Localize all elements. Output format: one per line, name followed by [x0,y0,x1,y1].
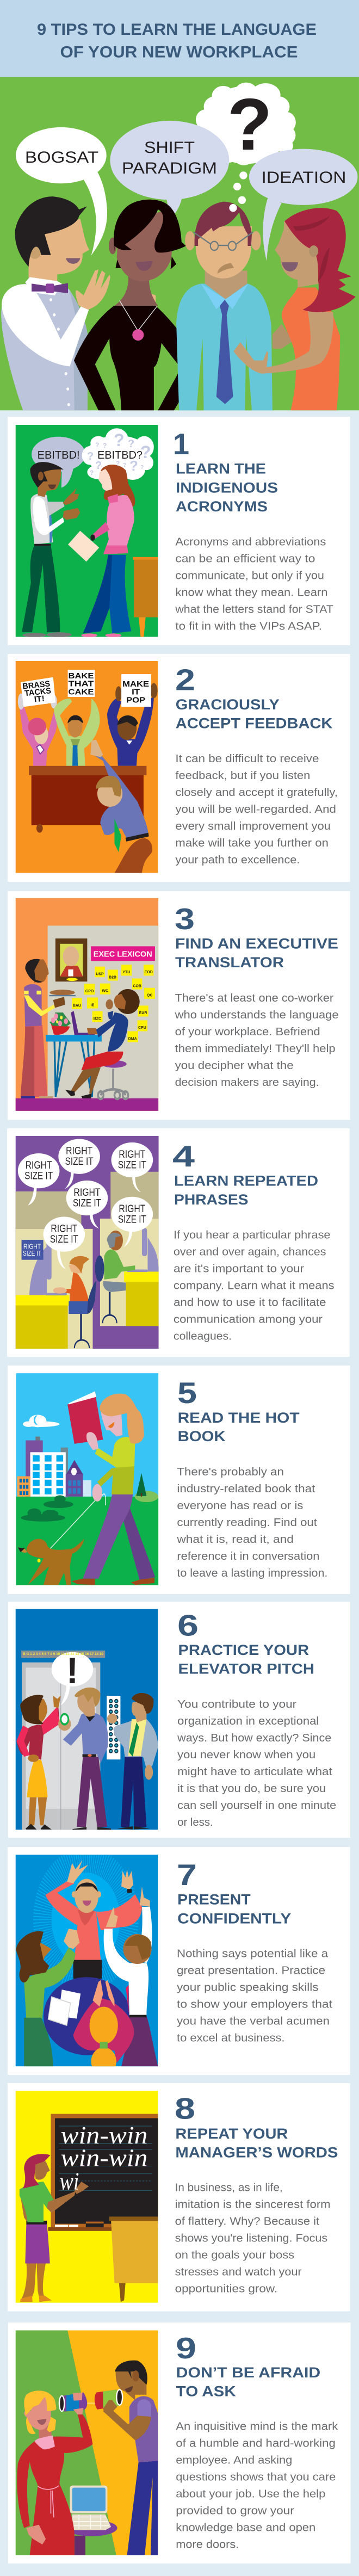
panel: tip 8 [8,2083,350,2311]
illustration: coworkers holding jargon signs: CAKE [69,687,94,696]
body text tip 5: what it is, read it, and [176,1534,294,1546]
heading tip 5: READ THE HOT [178,1410,300,1426]
illustration: executive lexicon office: QC [147,993,153,998]
heading tip 7: CONFIDENTLY [177,1910,291,1926]
body text tip 9: employee. And asking [176,2455,292,2467]
illustration: cubicles repeating right size it: SIZE IT [118,1160,146,1171]
illustration: woman writing win-win on chalkboard: win-win [61,2121,148,2149]
body text tip 9 [176,2421,338,2550]
heading tip 1: INDIGENOUS [176,480,278,496]
illustration: executive lexicon office: EAR [139,1011,147,1015]
panel: tip 9 [8,2322,350,2563]
body text tip 3: you decipher what the [175,1060,294,1072]
illustration: coworkers and acronym confusion: ? [90,469,94,477]
body text tip 7: to show your employers that [177,1998,332,2010]
panel: tip 6 [8,1602,350,1838]
body text tip 6: you never know when you [177,1749,315,1761]
illustration: executive lexicon office: BZC [94,1017,101,1021]
body text tip 1: communicate, but only if you [175,570,324,582]
icon: speech bubble bogsat [16,127,107,256]
body text tip 1: can be an efficient way to [175,553,315,565]
bubble label: shift paradigm [122,139,217,177]
heading tip 4: PHRASES [174,1191,248,1208]
illustration: confident presenter [16,1855,158,2075]
body text tip 2: your path to excellence. [175,854,300,866]
body text tip 5: to leave a lasting impression. [177,1567,327,1579]
body text tip 2: feedback, but if you listen [175,770,310,782]
body text tip 3: who understands the language [174,1009,339,1021]
body text tip 3 [174,992,339,1089]
number 9: 9 [176,2331,196,2365]
illustration: executive lexicon office: CPU [138,1026,146,1030]
body text tip 1: know what they mean. Learn [175,587,327,599]
panel: tip 7 [8,1847,350,2075]
body text tip 3: of your workplace. Befriend [175,1026,320,1038]
illustration: executive lexicon office: B2B [109,975,116,979]
illustration: coworkers and acronym confusion: EBITBD? [97,449,143,461]
bubble label: ideation: IDEATION [261,169,346,187]
body text tip 5: There's probably an [177,1466,284,1478]
body text tip 4: are it's important to your [174,1263,304,1275]
body text tip 4: company. Learn what it means [174,1280,334,1292]
heading tip 8 [175,2126,338,2160]
body text tip 6: or less. [177,1817,213,1828]
heading tip 6: PRACTICE YOUR [178,1642,309,1658]
illustration: executive lexicon office: EOD [145,971,153,974]
illustration: executive lexicon office: IE [91,1003,95,1007]
heading tip 3: FIND AN EXECUTIVE [175,935,338,952]
hero illustration: four coworkers talking [0,77,359,410]
heading tip 1: ACRONYMS [176,498,268,515]
body text tip 2: closely and accept it gratefully, [175,787,338,799]
body text tip 4: If you hear a particular phrase [174,1230,331,1241]
illustration: coworkers and acronym confusion: ? [140,465,144,471]
illustration: executive lexicon office: GPO [85,990,94,993]
body text tip 9: of a humble and hard-working [176,2437,336,2449]
illustration: executive lexicon office: USP [96,973,104,976]
illustration: cubicles repeating right size it: SIZE IT [65,1156,94,1167]
body text tip 8: In business, as in life, [175,2182,283,2194]
panel: tip 4 [7,1128,350,1357]
illustration: cubicles repeating right size it: RIGHT [119,1149,146,1160]
illustration: executive lexicon office [16,898,158,1111]
illustration: cubicles repeating right size it: RIGHT [51,1224,78,1235]
illustration: coworkers holding jargon signs: TACKS [24,686,52,698]
illustration: elevator conversation [16,1609,158,1830]
icon: thought bubble [196,83,296,204]
illustration: coworkers and acronym confusion: EBITBD! [38,449,80,461]
icon: question mark: ? [227,83,272,165]
illustration: cubicles repeating right size it: SIZE IT [24,1171,53,1182]
heading tip 1: LEARN THE [176,460,266,477]
body text tip 5: currently reading. Find out [177,1517,317,1529]
illustration: coworkers and acronym confusion: ? [128,438,134,450]
illustration: cubicles repeating right size it: SIZE IT [73,1198,101,1209]
illustration: woman writing win-win on chalkboard: win-win [61,2143,148,2171]
number 4: 4 [172,1139,195,1173]
heading tip 8: REPEAT YOUR [175,2126,288,2142]
body text tip 1: Acronyms and abbreviations [175,536,326,548]
illustration: woman writing win-win on chalkboard: wi [60,2167,79,2195]
body text tip 4: and how to use it to facilitate [174,1297,326,1309]
illustration: elevator conversation: ! [66,1650,78,1691]
heading tip 2: GRACIOUSLY [176,696,280,713]
illustration: tin can telephone [16,2330,158,2555]
icon: speech bubble shift paradigm [110,121,229,222]
heading tip 5 [178,1410,300,1444]
body text tip 9: about your job. Use the help [176,2488,325,2500]
body text tip 8: on the goals your boss [175,2249,294,2261]
body text tip 7: you have the verbal acumen [177,2015,330,2027]
body text tip 7: your public speaking skills [177,1981,319,1993]
body text tip 6: You contribute to your [177,1698,297,1710]
number 5: 5 [177,1376,197,1410]
illustration: woman writing win-win on chalkboard [16,2091,158,2303]
illustration: woman reading while walking dog [16,1373,158,1585]
body text tip 6: it is that you do, be sure you [177,1783,326,1795]
number 8: 8 [175,2092,195,2126]
illustration: cubicles repeating right size it: SIZE IT [23,1249,41,1257]
number 6: 6 [177,1608,199,1642]
body text tip 1: to fit in with the VIPs ASAP. [175,621,322,633]
body text tip 6: can sell yourself in one minute [177,1800,336,1812]
heading tip 8: MANAGER’S WORDS [175,2144,338,2160]
illustration: coworkers and acronym confusion: ? [123,462,126,468]
person: man with glasses [176,202,273,410]
body text tip 9: An inquisitive mind is the mark [176,2421,338,2433]
illustration: coworkers and acronym confusion [16,425,158,637]
body text tip 9: provided to grow your [176,2505,294,2517]
body text tip 8: of flattery. Why? Because it [175,2215,320,2227]
body text tip 5: industry-related book that [177,1483,315,1495]
illustration: coworkers holding jargon signs: BRASS [22,679,51,691]
heading tip 2: ACCEPT FEEDBACK [176,715,333,731]
body text tip 7: to excel at business. [177,2032,285,2044]
body text tip 6: organization in exceptional [177,1715,319,1727]
heading tip 5: BOOK [178,1428,226,1444]
heading tip 3: TRANSLATOR [175,954,284,971]
body text tip 8: imitation is the sincerest form [175,2198,331,2210]
illustration: coworkers and acronym confusion: ? [129,458,138,474]
number 3: 3 [175,902,195,936]
illustration: coworkers and acronym confusion: ? [87,450,94,462]
illustration: coworkers and acronym confusion: ? [103,442,107,449]
illustration: executive lexicon office: DMA [128,1037,137,1041]
body text tip 2: It can be difficult to receive [175,753,319,765]
body text tip 8: shows you're listening. Focus [175,2232,327,2244]
body text tip 6: ways. But how exactly? Since [177,1732,331,1744]
body text tip 6 [177,1698,336,1828]
illustration: cubicles repeating right size it: RIGHT [74,1187,101,1199]
illustration: executive lexicon office: YTU [122,971,130,974]
title banner: 9 TIPS TO LEARN THE LANGUAGE [37,21,317,39]
heading tip 3 [175,935,338,971]
number 1: 1 [173,427,189,461]
heading tip 1 [176,460,278,515]
illustration: coworkers and acronym confusion: ? [95,460,102,472]
illustration: coworkers and acronym confusion: ? [114,430,125,450]
body text tip 4 [174,1230,334,1343]
body text tip 8 [175,2182,331,2295]
title banner [0,0,359,77]
illustration: elevator conversation: B G 1 2 3 4 5 6 7 8 9 10 11 12 13 14 15 16 17 18 19 [23,1652,103,1656]
illustration: coworkers and acronym confusion: ? [116,460,120,467]
number 2: 2 [175,663,195,696]
heading tip 9: TO ASK [176,2383,236,2400]
illustration: coworkers and acronym confusion: ? [140,442,151,462]
body text tip 5: everyone has read or is [177,1500,303,1512]
body text tip 7 [177,1948,332,2044]
illustration: executive lexicon office: EXEC LEXICON [94,949,152,959]
illustration: cubicles repeating right size it: SIZE IT [50,1234,78,1245]
panel: tip 5 [8,1366,350,1594]
body text tip 9: knowledge base and open [176,2522,315,2534]
body text tip 5 [176,1466,327,1579]
heading tip 7: PRESENT [177,1891,251,1907]
illustration: executive lexicon office: COB [133,984,141,988]
heading tip 9: DON’T BE AFRAID [176,2364,320,2381]
panel: tip 3 [8,891,350,1120]
heading tip 2 [176,696,333,731]
body text tip 1 [175,536,333,633]
illustration: coworkers holding jargon signs: IT! [34,694,45,705]
body text tip 6: might have to articulate what [177,1766,332,1778]
body text tip 3: them immediately! They'll help [175,1043,336,1055]
body text tip 9: questions shows that you care [176,2471,336,2483]
bubble label: bogsat: BOGSAT [25,149,98,166]
body text tip 4: over and over again, chances [174,1246,326,1258]
heading tip 6 [178,1642,314,1677]
illustration: coworkers holding jargon signs: BAKE [69,671,94,681]
illustration: coworkers holding jargon signs: THAT [69,679,94,688]
body text tip 2: every small improvement you [175,820,331,832]
person: woman with necklace [74,200,200,410]
heading tip 4 [174,1173,318,1208]
bubble label: shift paradigm: SHIFT [144,139,195,157]
body text tip 4: communication among your [174,1314,323,1326]
body text tip 3: decision makers are saying. [175,1077,319,1089]
body text tip 4: colleagues. [174,1331,232,1343]
heading tip 7 [177,1891,291,1926]
body text tip 7: great presentation. Practice [177,1965,325,1976]
bubble label: shift paradigm: PARADIGM [122,159,217,177]
illustration: executive lexicon office: BAU [73,1004,81,1008]
illustration: cubicles repeating right size it: RIGHT [119,1203,146,1215]
body text tip 3: There's at least one co-worker [175,992,333,1004]
body text tip 2: you will be well-regarded. And [175,804,336,816]
illustration: executive lexicon office: WC [102,989,108,993]
illustration: cubicles repeating right size it: RIGHT [66,1146,92,1157]
illustration: coworkers holding jargon signs: MAKE [122,679,149,689]
body text tip 2 [175,753,338,866]
illustration: cubicles repeating right size it: RIGHT [26,1160,52,1171]
number 7: 7 [177,1858,197,1892]
illustration: coworkers and acronym confusion: ? [95,441,99,449]
panel: tip 2 [8,654,350,882]
body text tip 8: stresses and watch your [175,2266,302,2278]
body text tip 5: reference it in conversation [177,1550,319,1562]
illustration: cubicles repeating right size it: RIGHT [23,1243,41,1251]
body text tip 8: opportunities grow. [175,2283,277,2295]
heading tip 9 [176,2364,320,2400]
illustration: cubicles repeating right size it [16,1136,159,1349]
illustration: coworkers holding jargon signs [16,661,158,873]
illustration: coworkers holding jargon signs: POP [126,695,145,705]
body text tip 9: more doors. [176,2538,239,2550]
person: woman with red hair [233,208,356,410]
person: man with bow tie [1,196,110,410]
body text tip 1: what the letters stand for STAT [175,604,333,616]
illustration: coworkers holding jargon signs: IT [132,687,140,696]
title banner: OF YOUR NEW WORKPLACE [60,44,298,61]
illustration: cubicles repeating right size it: SIZE IT [118,1214,146,1225]
heading tip 6: ELEVATOR PITCH [178,1660,314,1677]
panel: tip 1 [8,417,350,645]
heading tip 4: LEARN REPEATED [174,1173,318,1189]
body text tip 7: Nothing says potential like a [177,1948,329,1960]
body text tip 2: make will take you further on [175,837,329,849]
icon: speech bubble ideation [249,149,357,261]
